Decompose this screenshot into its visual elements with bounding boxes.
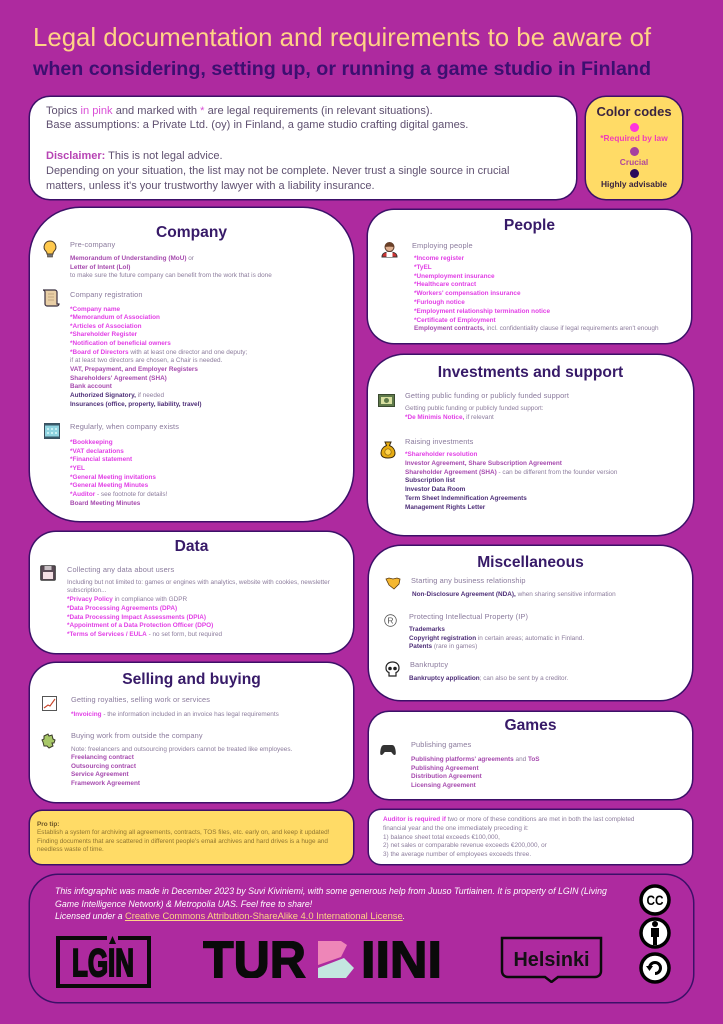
panel: selling and buying — [30, 663, 353, 802]
heading: company: Company — [156, 224, 227, 241]
list: regular duties: *YEL — [70, 465, 85, 472]
list: pre-company: Memorandum of Understanding (MoU) or — [70, 255, 194, 262]
list: raising investments — [405, 451, 617, 511]
text: auditor requirement: Auditor is required if two or more of these conditions are met in both the last completed — [383, 816, 634, 823]
icon: floppy disk — [40, 565, 56, 581]
list: company registration: *Articles of Association — [70, 323, 142, 330]
logo: Helsinki — [500, 936, 602, 983]
list: publishing games: Licensing Agreement — [411, 782, 476, 789]
icons: Creative Commons licence badges — [639, 884, 671, 984]
icon: banknote — [378, 394, 395, 407]
title: Legal documentation and requirements to be aware of — [33, 24, 651, 52]
panel: games — [369, 712, 692, 799]
logo: Helsinki: Helsinki — [514, 949, 590, 971]
list: employing people: *Income register — [414, 255, 464, 262]
list: company registration: Insurances (office, property, liability, travel) — [70, 401, 202, 408]
list: buying work: Framework Agreement — [71, 780, 140, 787]
panel: color codes — [586, 97, 682, 199]
logo: Turbiini — [203, 941, 442, 978]
text: pro tip: Establish a system for archiving all agreements, contracts, TOS files, etc. early on, and keep it updated! — [37, 829, 329, 836]
list: regular duties — [70, 439, 167, 507]
icon: skull — [385, 661, 400, 677]
list: IP: Trademarks — [409, 626, 445, 633]
subheading: regularly: Regularly, when company exists — [70, 422, 179, 431]
heading: games: Games — [504, 717, 556, 734]
icon: person — [382, 242, 398, 258]
subheading: collecting data: Collecting any data about users — [67, 565, 174, 574]
panel: investments and support — [368, 355, 693, 535]
heading: color codes: Color codes — [596, 104, 672, 119]
list: regular duties: *General Meeting invitations — [70, 474, 156, 481]
icon: money bag — [380, 442, 396, 458]
list: company registration: *Notification of beneficial owners — [70, 340, 171, 347]
list: public funding — [405, 405, 544, 421]
subheading: pre-company: Pre-company — [70, 240, 115, 249]
list: employing people: *Healthcare contract — [414, 281, 476, 288]
icon: office building — [44, 423, 60, 439]
list: company registration — [70, 306, 247, 408]
list: company registration: Authorized Signatory, if needed — [70, 392, 164, 399]
panel: introduction and disclaimer — [30, 97, 576, 199]
heading: miscellaneous: Miscellaneous — [477, 554, 584, 571]
list: employing people: *Workers' compensation insurance — [414, 290, 521, 297]
list: collecting data: *Appointment of a Data Protection Officer (DPO) — [67, 622, 213, 629]
text: credits and license: Licensed under a Creative Commons Attribution-ShareAlike 4.0 International License. — [55, 910, 405, 921]
list: regular duties: *Financial statement — [70, 456, 132, 463]
subheading: getting royalties: Getting royalties, selling work or services — [71, 695, 210, 704]
list: pre-company: to make sure the future company can benefit from the work that is done — [70, 272, 272, 279]
list: employing people: *Employment relationship termination notice — [414, 308, 550, 315]
list: raising investments: Shareholder Agreement (SHA) - can be different from the founder version — [405, 469, 617, 476]
list: raising investments: Investor Agreement, Share Subscription Agreement — [405, 460, 562, 467]
list: public funding: *De Minimis Notice, if relevant — [405, 414, 494, 421]
text: pro tip: Pro tip: — [37, 820, 59, 828]
list: regular duties: *General Meeting Minutes — [70, 482, 148, 489]
icon: light bulb — [44, 240, 56, 258]
icon: scroll — [43, 289, 60, 307]
text: topics and assumptions: Base assumptions: a Private Ltd. (oy) in Finland, a game studio crafting digital games. — [46, 119, 468, 131]
list: company registration: VAT, Prepayment, and Employer Registers — [70, 366, 198, 373]
legend: highly advisable: Highly advisable — [601, 178, 667, 188]
list: collecting data: *Terms of Services / EULA - no set form, but required — [67, 631, 222, 638]
panel: people — [368, 210, 691, 343]
list: regular duties: *Bookkeeping — [70, 439, 113, 446]
list: regular duties: *Auditor - see footnote for details! — [70, 491, 167, 498]
text: disclaimer: Disclaimer: This is not legal advice. — [46, 150, 223, 162]
panel: footer credits — [30, 875, 693, 1002]
heading: selling and buying: Selling and buying — [122, 671, 261, 688]
list: pre-company: Letter of Intent (LoI) — [70, 264, 130, 271]
panel: miscellaneous — [369, 546, 692, 700]
list: regular duties: *VAT declarations — [70, 448, 124, 455]
text: auditor requirement: 1) balance sheet total exceeds €100,000, — [383, 834, 500, 840]
text: topics and assumptions — [46, 104, 468, 131]
icons: Creative Commons licence badges: CC — [646, 892, 664, 908]
list: collecting data: *Privacy Policy in compliance with GDPR — [67, 596, 187, 603]
list: company registration: *Company name — [70, 306, 120, 312]
list: raising investments: Term Sheet Indemnification Agreements — [405, 495, 527, 502]
panel: data — [30, 532, 353, 653]
icon: puzzle piece — [41, 733, 56, 749]
icon: game controller — [380, 745, 396, 755]
list: buying work: Service Agreement — [71, 771, 129, 778]
text: disclaimer: matters, unless it's your trustworthy lawyer with a liability insurance. — [46, 180, 375, 192]
list: buying work: Outsourcing contract — [71, 763, 136, 770]
list: publishing games: Distribution Agreement — [411, 773, 482, 780]
legend: highly advisable — [601, 169, 667, 188]
list: IP: Patents (rare in games) — [409, 643, 477, 650]
legend: crucial — [620, 147, 648, 166]
panel: auditor footnote — [369, 810, 692, 864]
list: collecting data — [67, 578, 330, 638]
list: NDA: Non-Disclosure Agreement (NDA), when sharing sensitive information — [412, 591, 616, 598]
subheading: buying work: Buying work from outside the company — [71, 731, 203, 740]
icon: chart — [42, 696, 57, 711]
list: collecting data: *Data Processing Agreements (DPA) — [67, 605, 177, 612]
list: buying work — [71, 746, 292, 787]
icon: registered mark: R — [387, 616, 394, 626]
subheading: publishing games: Publishing games — [411, 740, 471, 749]
subheading: public funding: Getting public funding or publicly funded support — [405, 391, 569, 400]
list: buying work: Freelancing contract — [71, 754, 134, 761]
list: raising investments: Management Rights Letter — [405, 504, 485, 511]
list: public funding: Getting public funding or publicly funded support: — [405, 405, 544, 412]
list: collecting data: *Data Processing Impact Assessments (DPIA) — [67, 614, 206, 621]
text: auditor requirement: 2) net sales or comparable revenue exceeds €200,000, or — [383, 842, 547, 849]
text: pro tip: needless waste of time. — [37, 846, 104, 853]
subheading: protecting IP: Protecting Intellectual Property (IP) — [409, 612, 528, 621]
legend: required by law: *Required by law — [600, 132, 668, 142]
subheading: business relationship: Starting any business relationship — [411, 576, 526, 585]
text: credits and license — [55, 886, 607, 921]
list: employing people: *TyEL — [414, 264, 432, 271]
heading: people: People — [504, 217, 555, 234]
list: raising investments: Subscription list — [405, 477, 455, 484]
list: collecting data: subscription... — [67, 587, 106, 594]
list: regular duties: Board Meeting Minutes — [70, 500, 140, 507]
list: IP — [409, 626, 584, 650]
list: company registration: *Board of Directors with at least one director and one deputy; — [70, 349, 247, 356]
list: buying work: Note: freelancers and outsourcing providers cannot be treated like employees. — [71, 746, 292, 752]
text: topics and assumptions: Topics in pink and marked with * are legal requirements (in relevant situations). — [46, 104, 433, 116]
panel: pro tip — [30, 811, 353, 864]
list: raising investments: *Shareholder resolution — [405, 451, 477, 458]
list: employing people: *Certificate of Employment — [414, 317, 496, 324]
subheading: employing people: Employing people — [412, 241, 473, 250]
text: credits and license: This infographic was made in December 2023 by Suvi Kiviniemi, with some generous help from Juuso Turtiainen. It is property of LGIN (Living — [55, 886, 607, 896]
list: publishing games: Publishing Agreement — [411, 765, 479, 772]
list: pre-company — [70, 255, 272, 279]
text: auditor requirement — [383, 816, 634, 858]
legend: required by law — [600, 123, 668, 142]
list: company registration: Bank account — [70, 383, 112, 390]
text: disclaimer: Depending on your situation, the list may not be complete. Never trust a single source in crucial — [46, 164, 509, 176]
text: pro tip — [37, 820, 329, 853]
list: company registration: Shareholders' Agreement (SHA) — [70, 375, 167, 382]
list: publishing games — [411, 756, 540, 789]
list: bankruptcy: Bankruptcy application; can also be sent by a creditor. — [409, 675, 568, 682]
icon: handshake — [386, 578, 400, 590]
list: invoicing: *Invoicing - the information included in an invoice has legal requirements — [71, 711, 279, 718]
subheading: company registration: Company registration — [70, 290, 143, 299]
list: company registration: *Shareholder Register — [70, 331, 137, 338]
list: collecting data: Including but not limited to: games or engines with analytics, website with cookies, newsletter — [67, 578, 330, 586]
text: auditor requirement: financial year and the one immediately preceding it: — [383, 825, 529, 832]
list: IP: Copyright registration in certain areas; automatic in Finland. — [409, 635, 584, 642]
subheading: raising investments: Raising investments — [405, 437, 473, 446]
text: disclaimer — [46, 150, 509, 192]
heading: data: Data — [175, 538, 208, 555]
icon: registered mark — [384, 614, 397, 627]
heading: investments and support: Investments and support — [438, 364, 623, 381]
text: auditor requirement: 3) the average number of employees exceeds three. — [383, 851, 531, 858]
panel: company — [30, 208, 353, 521]
list: employing people — [414, 255, 659, 332]
legend: crucial: Crucial — [620, 156, 648, 166]
text: pro tip: Finding documents that are scattered in different people's email archives and hard drives is a huge and — [37, 838, 328, 845]
list: employing people: *Unemployment insurance — [414, 273, 495, 280]
list: employing people: Employment contracts, incl. confidentiality clause if legal requirements aren't enough — [414, 325, 659, 332]
list: publishing games: Publishing platforms' agreements and ToS — [411, 756, 540, 763]
list: employing people: *Furlough notice — [414, 299, 465, 306]
list: company registration: if at least two directors are chosen, a Chair is needed. — [70, 357, 222, 364]
logo: LGIN — [56, 936, 151, 988]
subheading: bankruptcy: Bankruptcy — [410, 660, 448, 669]
list: raising investments: Investor Data Room — [405, 486, 465, 493]
subtitle: when considering, setting up, or running a game studio in Finland — [33, 58, 651, 80]
text: credits and license: Game Intelligence Network) & Metropolia UAS. Feel free to share! — [55, 898, 312, 908]
list: company registration: *Memorandum of Association — [70, 314, 160, 321]
